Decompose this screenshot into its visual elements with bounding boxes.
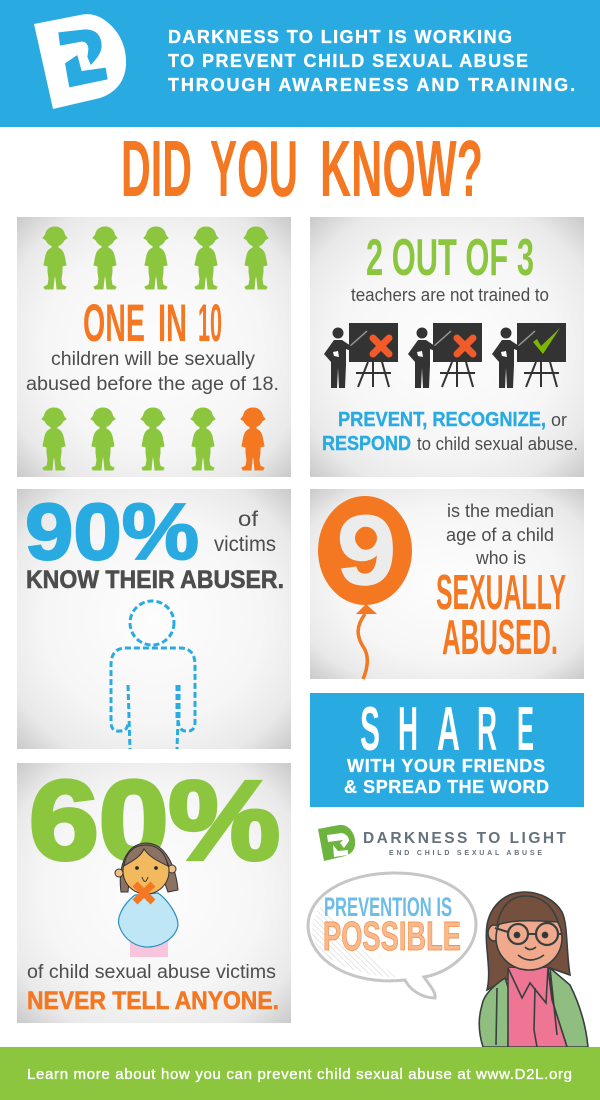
share heading: R	[477, 695, 497, 764]
icon row: children top	[43, 227, 268, 289]
share heading: H	[398, 695, 418, 764]
footer band	[0, 1047, 600, 1100]
panel: 90 percent	[17, 487, 291, 749]
description bottom: PREVENT, RECOGNIZE,	[338, 409, 546, 431]
description	[26, 349, 279, 395]
panel: 9 median age	[310, 489, 584, 679]
description: of child sexual abuse victims	[27, 962, 276, 983]
share heading	[360, 695, 534, 764]
panel: 2 out of 3 teachers	[310, 217, 584, 477]
header text	[168, 27, 575, 95]
share text: & SPREAD THE WORD	[344, 777, 549, 797]
description: age of a child	[446, 525, 554, 545]
speech bubble: prevention is possible: POSSIBLE	[323, 913, 461, 959]
stat heading: IN	[158, 294, 187, 353]
panel: share: E	[517, 695, 534, 764]
wordmark: DARKNESS TO LIGHT	[363, 830, 567, 847]
share text: WITH YOUR FRIENDS	[347, 756, 545, 776]
header text: THROUGH AWARENESS AND TRAINING.	[168, 75, 575, 95]
emphasis: NEVER TELL ANYONE.	[27, 987, 279, 1015]
description	[446, 501, 554, 568]
illustration: woman with glasses	[479, 892, 588, 1047]
speech bubble: prevention is possible	[308, 873, 476, 998]
description bottom: RESPOND	[322, 433, 411, 455]
panel: 60 percent	[17, 758, 291, 1023]
panel: one in 10: 10	[198, 294, 222, 353]
icon: dashed person	[111, 601, 195, 749]
logo: Darkness to Light	[318, 825, 567, 861]
description: abused before the age of 18.	[26, 374, 279, 395]
description bottom: to child sexual abuse.	[417, 434, 578, 454]
tagline: END CHILD SEXUAL ABUSE	[389, 850, 542, 857]
icon: balloon with 9: 9	[337, 495, 396, 605]
icon: D2L logo	[34, 14, 126, 109]
emphasis: KNOW THEIR ABUSER.	[26, 566, 284, 594]
description top: teachers are not trained to	[351, 285, 549, 305]
illustration: girl with X over mouth	[115, 843, 178, 957]
bubble text: PREVENTION IS	[324, 892, 452, 922]
panel: share	[310, 693, 584, 807]
description bottom	[322, 409, 578, 455]
stat heading: ONE	[83, 294, 145, 353]
share text	[344, 756, 549, 797]
icon: balloon with 9	[318, 495, 412, 679]
icon row: children bottom	[42, 408, 265, 470]
footer text: Learn more about how you can prevent child sexual abuse at www.D2L.org	[27, 1066, 572, 1083]
description: who is	[475, 548, 526, 568]
description: of	[238, 508, 258, 531]
description: is the median	[447, 501, 554, 521]
icon: teachers at boards	[324, 323, 566, 388]
title: DID	[121, 124, 192, 213]
header text: TO PREVENT CHILD SEXUAL ABUSE	[168, 51, 528, 71]
share heading: A	[437, 695, 460, 764]
icon: green D2L mark	[318, 825, 355, 861]
stat: 60%: 60%	[29, 758, 280, 883]
description: victims	[214, 533, 276, 556]
title	[121, 124, 483, 213]
description	[214, 508, 276, 556]
panel: one in 10	[17, 217, 291, 477]
title: YOU	[210, 124, 298, 213]
description bottom: or	[551, 410, 567, 430]
stat: 90%: 90%	[25, 487, 199, 576]
description: children will be sexually	[51, 349, 256, 370]
header text: DARKNESS TO LIGHT IS WORKING	[168, 27, 512, 47]
emphasis	[436, 566, 566, 665]
header band	[0, 0, 600, 127]
share heading: S	[360, 695, 380, 764]
